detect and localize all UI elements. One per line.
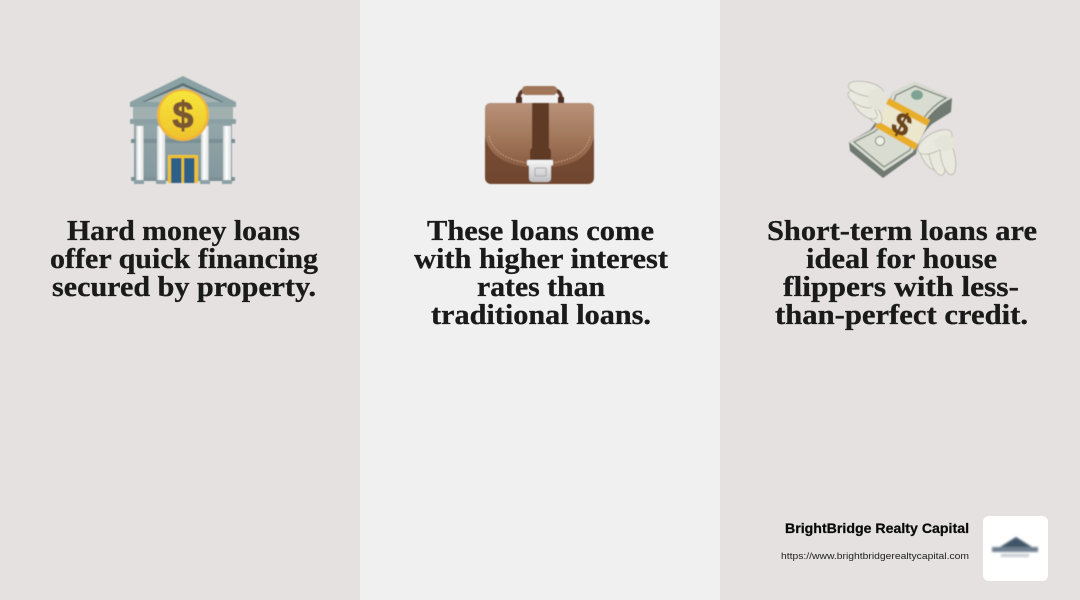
icon: bank with dollar coin: $	[172, 95, 194, 137]
heading: center column: rates than	[477, 271, 605, 303]
panel: center background	[360, 0, 720, 600]
icon: money with wings	[845, 78, 959, 178]
brand name: BrightBridge Realty Capital	[785, 520, 969, 536]
icon: bank with dollar coin	[130, 76, 236, 184]
icon: money with wings: $	[886, 105, 918, 144]
heading: right column: Short-term loans are	[767, 215, 1037, 247]
heading: center column: traditional loans.	[431, 299, 651, 331]
heading: right column: flippers with less-	[783, 271, 1019, 303]
heading: right column: ideal for house	[806, 243, 997, 275]
heading: center column: with higher interest	[414, 243, 668, 275]
heading: left column: offer quick financing	[50, 243, 319, 275]
logo card	[983, 516, 1048, 581]
brand url: https://www.brightbridgerealtycapital.com	[781, 551, 969, 562]
heading: center column: These loans come	[427, 215, 654, 247]
panel: left background	[0, 0, 360, 600]
icon: brown briefcase	[485, 86, 594, 184]
panel: right background	[720, 0, 1080, 600]
heading: left column: Hard money loans	[67, 215, 300, 247]
heading: left column: secured by property.	[52, 271, 316, 303]
heading: right column: than-perfect credit.	[775, 299, 1028, 331]
